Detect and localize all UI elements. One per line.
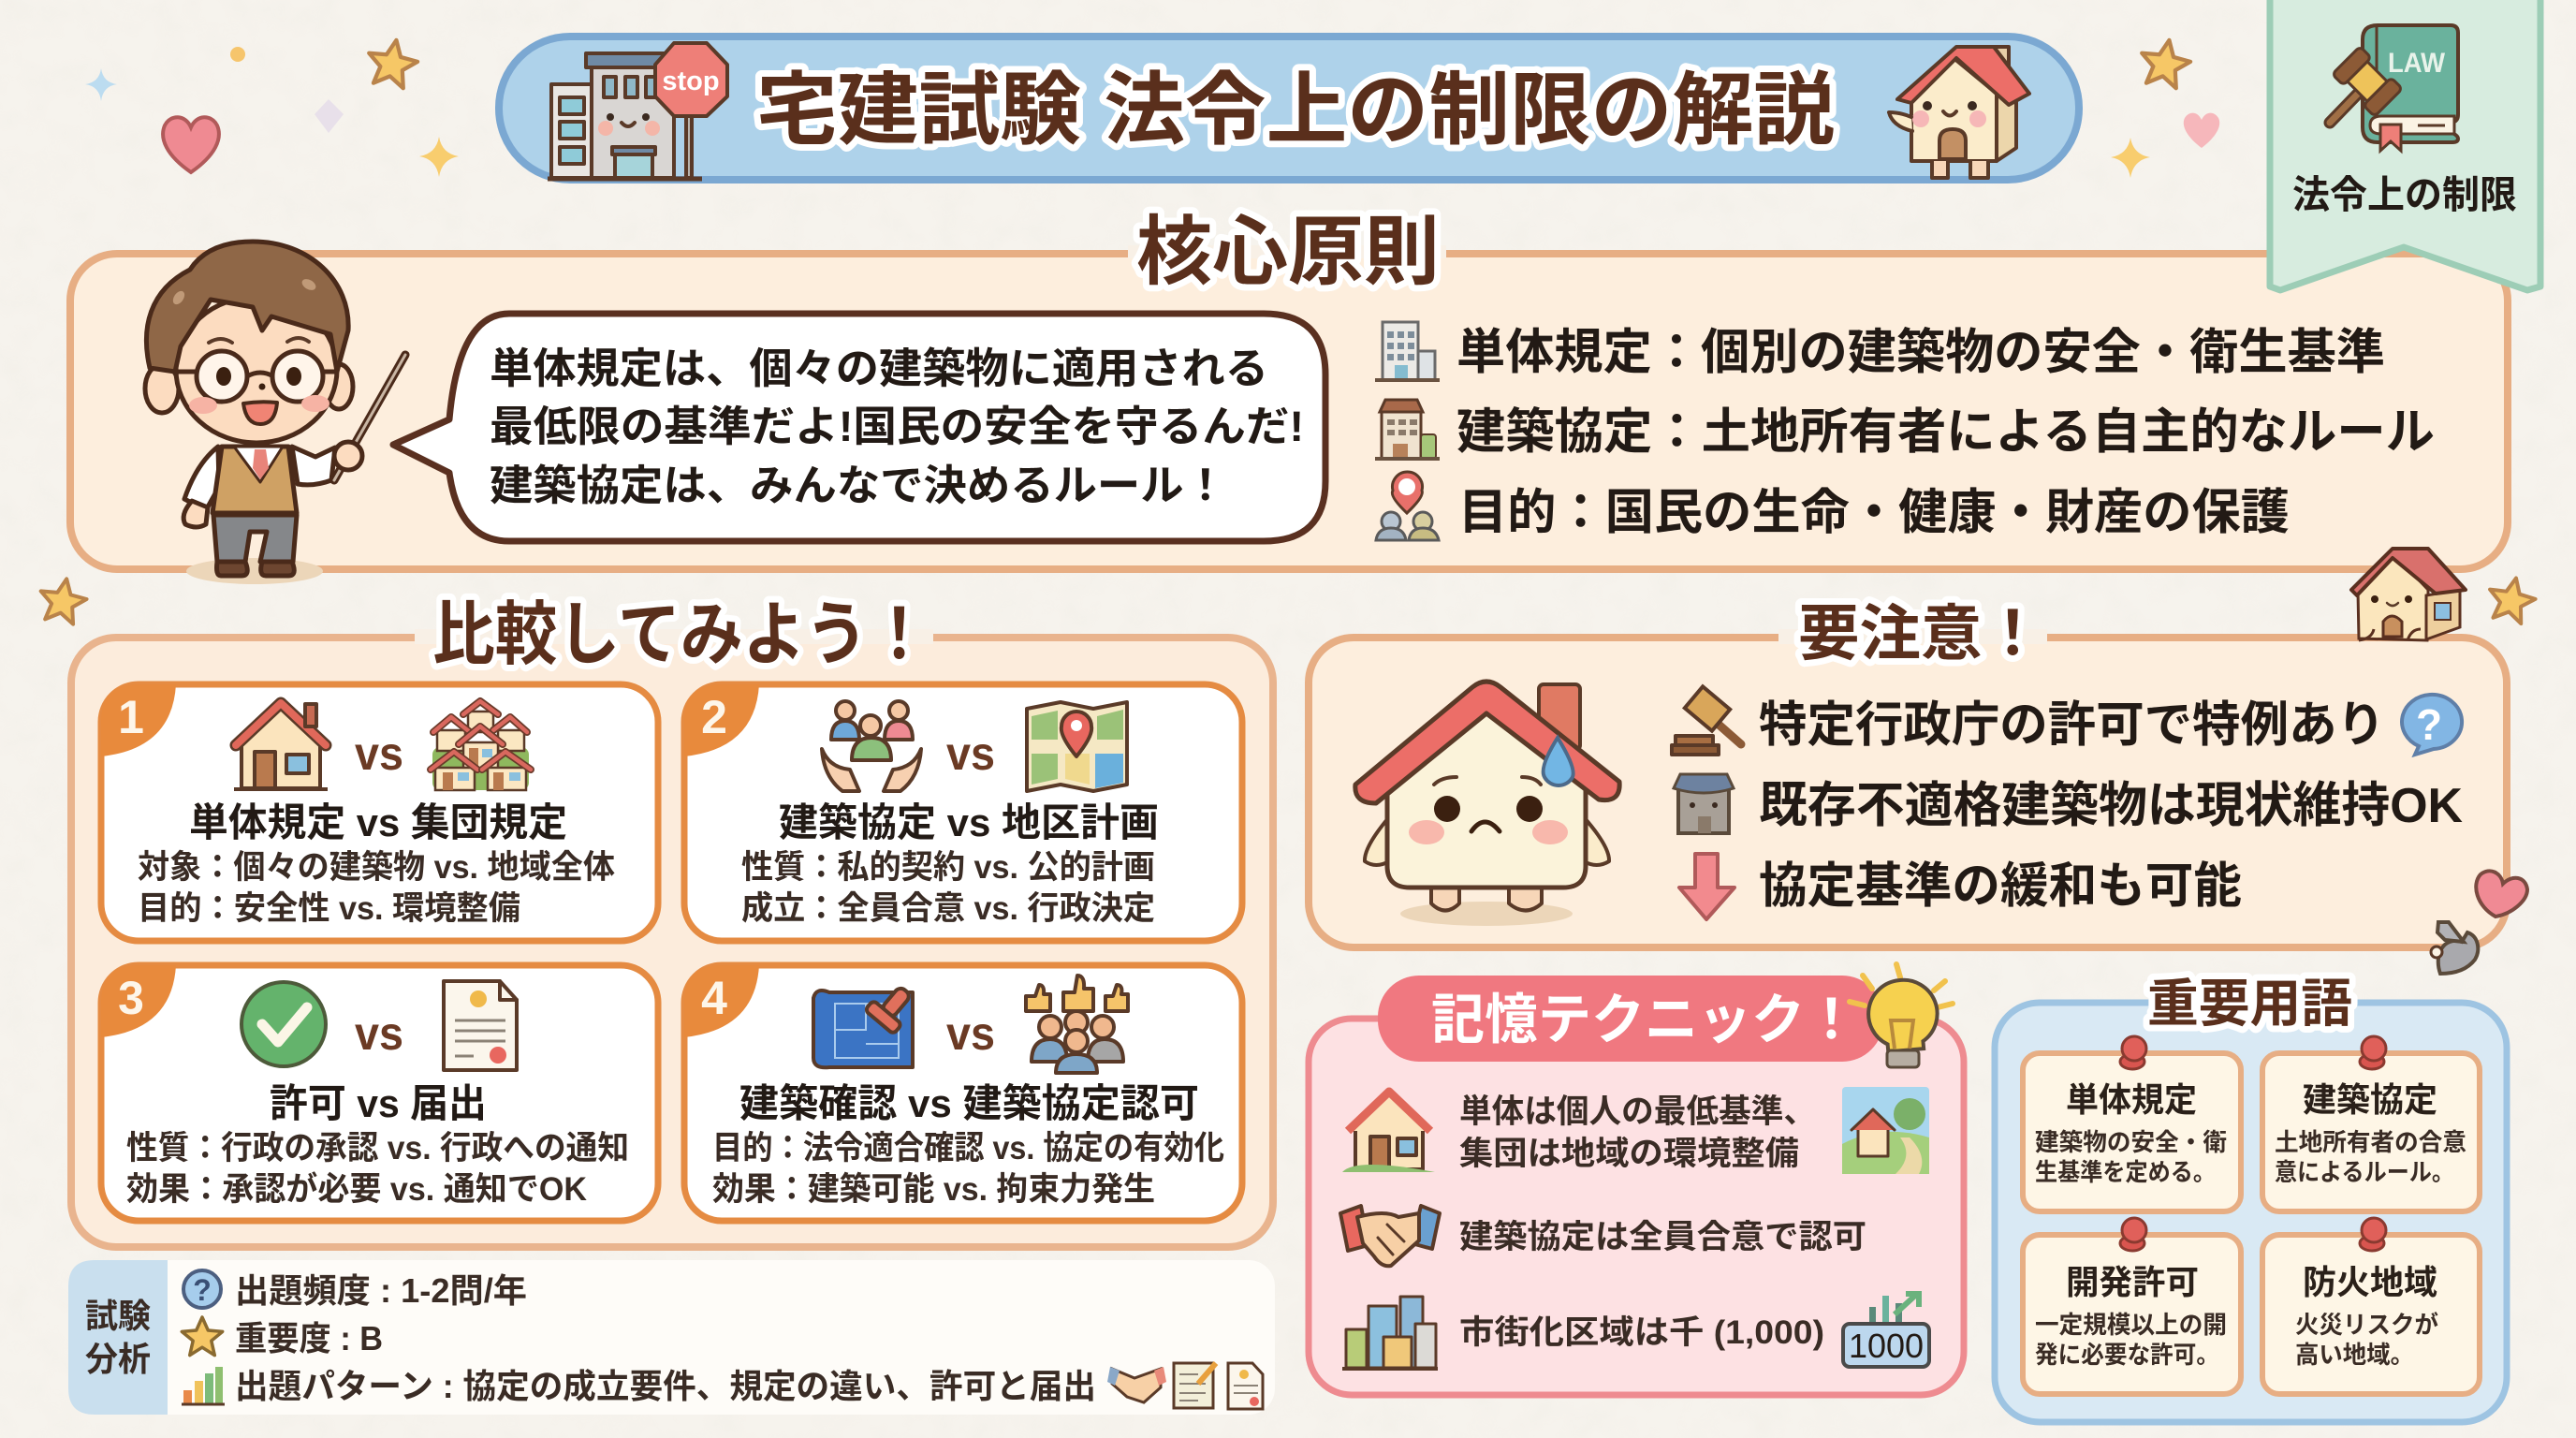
card 4: building confirmation vs agreement approval: vs — [946, 1007, 995, 1060]
panel: memory technique: 単体は個人の最低基準、 — [1459, 1093, 1816, 1130]
icon: 1000 counter with chart: 1000 — [1849, 1327, 1924, 1365]
icon: certificate — [444, 981, 517, 1070]
icon: light bulb — [1850, 964, 1953, 1067]
icon: bars — [182, 1367, 225, 1404]
icon: house — [234, 703, 328, 789]
character: worried house — [1355, 682, 1619, 926]
panel: memory technique: 建築協定は全員合意で認可 — [1459, 1219, 1866, 1255]
card 1: single vs group rules: 目的：安全性 vs. 環境整備 — [138, 890, 520, 927]
icon: apartment building — [1375, 322, 1440, 380]
card 4: building confirmation vs agreement approval — [684, 965, 1242, 1221]
icon: group thumbs-up — [1026, 976, 1128, 1073]
icon: city skyline — [1342, 1297, 1438, 1369]
card 3: permit vs notification: vs — [355, 1007, 403, 1060]
icon: question — [183, 1270, 221, 1308]
tab: category ribbon: 法令上の制限 — [2292, 173, 2517, 216]
icon: down arrow — [1679, 854, 1734, 919]
panel: exam analysis: 重要度 : B — [235, 1319, 383, 1357]
panel: caution: 特定行政庁の許可で特例あり — [1759, 698, 2385, 753]
term card: agreement: 土地所有者の合意 — [2275, 1128, 2466, 1156]
card 3: permit vs notification: 3 — [118, 972, 144, 1024]
panel: exam analysis: 出題頻度 : 1-2問/年 — [235, 1271, 527, 1310]
tab: category ribbon — [2270, 0, 2540, 290]
icon: 1000 counter with chart — [1843, 1294, 1929, 1367]
icon: small handshake — [1107, 1367, 1166, 1402]
panel: core principles — [70, 211, 2508, 584]
icon: group of houses — [431, 701, 531, 790]
card 4: building confirmation vs agreement approval: 目的：法令適合確認 vs. 協定の有効化 — [712, 1130, 1224, 1167]
panel: memory technique: 市街化区域は千 (1,000) — [1459, 1314, 1824, 1351]
panel: exam analysis: 分析 — [85, 1340, 151, 1378]
card 2: agreement vs district plan: 2 — [701, 691, 727, 743]
panel: caution — [1309, 599, 2507, 947]
title banner — [499, 37, 2079, 180]
icon: people in hands — [822, 701, 921, 791]
term card: fire zone: 防火地域 — [2303, 1263, 2437, 1301]
icon: old building — [1674, 774, 1734, 833]
panel: exam analysis: 試験 — [85, 1297, 151, 1335]
heading: caution: 要注意！ — [1798, 599, 2043, 668]
icon: question bubble: ? — [2416, 700, 2442, 749]
panel: memory technique — [1309, 964, 1964, 1395]
list: principle definitions — [1375, 322, 2435, 540]
icon: question bubble — [2402, 695, 2462, 755]
term card: development permit: 発に必要な許可。 — [2035, 1341, 2219, 1369]
list: principle definitions: 単体規定：個別の建築物の安全・衛生基準 — [1456, 326, 2385, 380]
card 2: agreement vs district plan — [684, 684, 1242, 941]
heading: core principles: 核心原則 — [1136, 211, 1440, 295]
card 3: permit vs notification — [101, 965, 658, 1221]
card 2: agreement vs district plan: 成立：全員合意 vs. 行政決定 — [741, 890, 1155, 927]
icon: building with stop sign: stop — [662, 66, 720, 96]
card 1: single vs group rules: 単体規定 vs 集団規定 — [189, 800, 567, 844]
icon: smiling house — [1889, 47, 2029, 178]
term card: development permit — [2023, 1218, 2241, 1394]
card 4: building confirmation vs agreement approval: 効果：建築可能 vs. 拘束力発生 — [712, 1171, 1155, 1208]
panel: caution: 協定基準の緩和も可能 — [1759, 859, 2242, 914]
panel: key terms — [1995, 975, 2507, 1422]
term card: development permit: 開発許可 — [2066, 1263, 2199, 1301]
icon: small document — [1228, 1363, 1263, 1409]
term card: single rule: 建築物の安全・衛 — [2035, 1128, 2227, 1156]
card 1: single vs group rules — [101, 684, 658, 941]
panel: caution: 既存不適格建築物は現状維持OK — [1759, 779, 2463, 833]
term card: fire zone — [2262, 1218, 2480, 1394]
panel: comparisons — [71, 595, 1273, 1247]
term card: single rule — [2023, 1036, 2241, 1211]
icon: district map — [1027, 702, 1127, 791]
speech bubble: 最低限の基準だよ!国民の安全を守るんだ! — [490, 403, 1304, 450]
icon: building with stop sign — [548, 43, 727, 179]
term card: single rule: 生基準を定める。 — [2035, 1158, 2216, 1186]
term card: agreement: 建築協定 — [2303, 1080, 2437, 1119]
list: principle definitions: 目的：国民の生命・健康・財産の保護 — [1458, 486, 2290, 540]
card 1: single vs group rules: 対象：個々の建築物 vs. 地域全体 — [138, 849, 615, 886]
icon: question: ? — [193, 1273, 212, 1307]
card 4: building confirmation vs agreement approval: 4 — [701, 972, 727, 1024]
title text: 宅建試験 法令上の制限の解説 — [756, 66, 1835, 155]
icon: landscape — [1842, 1087, 1929, 1174]
term card: agreement: 意によるルール。 — [2275, 1158, 2454, 1186]
icon: law book and gavel: LAW — [2388, 48, 2446, 79]
card 4: building confirmation vs agreement approval: 建築確認 vs 建築協定認可 — [739, 1081, 1199, 1125]
term card: development permit: 一定規模以上の開 — [2035, 1311, 2227, 1339]
term card: single rule: 単体規定 — [2066, 1080, 2197, 1119]
decorative stars and hearts — [37, 36, 2539, 625]
icon: brown building — [1375, 400, 1440, 459]
heading pill — [1378, 976, 1883, 1062]
icon: handshake — [1340, 1206, 1440, 1266]
icon: heart with gray ornament — [2431, 871, 2527, 974]
heading: key terms: 重要用語 — [2147, 975, 2352, 1033]
icon: green check — [242, 982, 326, 1066]
card 3: permit vs notification: 性質：行政の承認 vs. 行政への通知 — [126, 1130, 629, 1167]
card 2: agreement vs district plan: 建築協定 vs 地区計画 — [779, 800, 1159, 844]
card 3: permit vs notification: 効果：承認が必要 vs. 通知でOK — [126, 1171, 587, 1208]
list: principle definitions: 建築協定：土地所有者による自主的なルール — [1456, 405, 2435, 460]
term card: fire zone: 火災リスクが — [2295, 1311, 2438, 1339]
card 1: single vs group rules: 1 — [118, 691, 144, 743]
icon: blueprint and stamp — [813, 978, 920, 1067]
card 1: single vs group rules: vs — [355, 727, 403, 780]
heading pill: 記憶テクニック！ — [1431, 990, 1858, 1050]
character: teacher with pointer — [145, 242, 405, 584]
card 2: agreement vs district plan: vs — [946, 727, 995, 780]
icon: people and pin — [1376, 472, 1439, 540]
card 3: permit vs notification: 許可 vs 届出 — [270, 1081, 487, 1125]
heading: comparisons: 比較してみよう！ — [432, 595, 930, 673]
card 2: agreement vs district plan: 性質：私的契約 vs. 公的計画 — [741, 849, 1155, 886]
icon: small sitting house — [2351, 549, 2466, 640]
icon: gavel — [1672, 686, 1741, 755]
term card: fire zone: 高い地域。 — [2295, 1341, 2414, 1369]
speech bubble — [393, 314, 1325, 541]
icon: star — [182, 1317, 223, 1356]
speech bubble: 建築協定は、みんなで決めるルール！ — [490, 462, 1227, 509]
icon: home — [1342, 1092, 1435, 1172]
speech bubble: 単体規定は、個々の建築物に適用される — [490, 345, 1268, 392]
panel: exam analysis: 出題パターン : 協定の成立要件、規定の違い、許可と届出 — [235, 1367, 1096, 1405]
panel: exam analysis — [68, 1260, 1275, 1415]
term card: agreement — [2262, 1036, 2480, 1211]
icon: note and pencil — [1174, 1363, 1216, 1408]
panel: memory technique: 集団は地域の環境整備 — [1459, 1136, 1799, 1172]
icon: law book and gavel — [2330, 25, 2458, 151]
